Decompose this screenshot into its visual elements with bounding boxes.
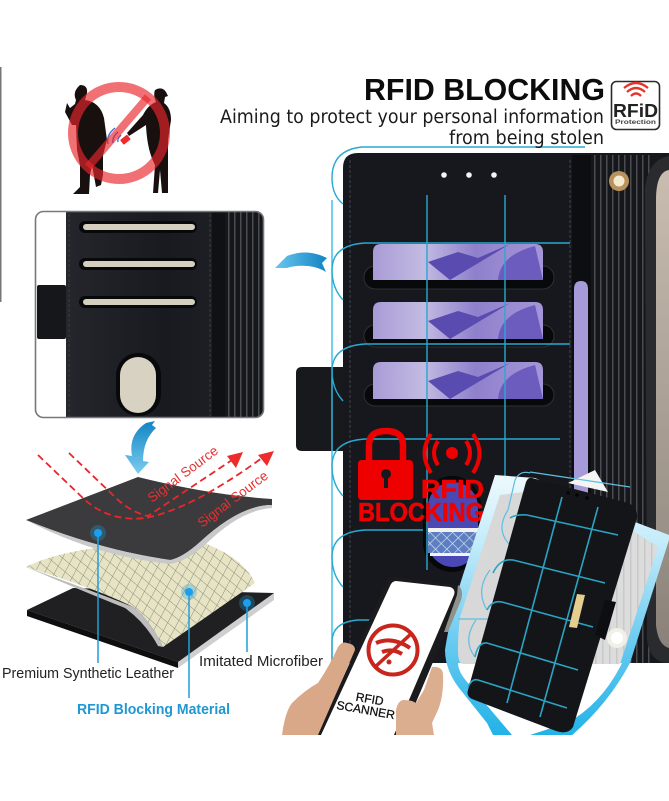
blue scan grid [332,147,585,662]
icon: broadcast [424,434,480,473]
eyelet [609,171,629,191]
phone body [318,592,458,735]
main wallet photo [296,147,669,663]
slot 1 [79,221,197,233]
white footer [0,735,669,801]
signal source labels [145,443,271,530]
shield interior, below the photo [458,663,622,735]
heading: RFID BLOCKING [364,72,605,107]
label: microfiber: Imitated Microfiber [199,654,323,670]
signal source labels: Signal Source [195,468,271,530]
accomplice silhouette [127,88,171,193]
three dots [441,172,497,178]
arrow: wallet to close-up [275,252,327,272]
label: leather: Premium Synthetic Leather [2,666,174,682]
shield ribs, right [595,534,658,664]
top layer: leather [26,477,272,560]
white clasp circle [607,628,627,648]
white peak [568,470,608,492]
arrow: close-up to layers [125,421,156,474]
oval window [423,476,481,572]
phone rim [444,585,462,632]
top dots [566,491,589,500]
man silhouette [65,85,107,194]
oval window [116,353,161,416]
icon: padlock [358,431,413,500]
slot 3 [79,296,197,308]
shielded wallet [445,470,669,745]
card slot 2 [364,302,554,347]
icon: RFID protection badge: Protection [615,120,656,126]
bottom layer: microfiber [27,588,274,668]
middle layer: shielding mesh [26,543,255,647]
shield interior over photo [458,490,658,664]
slot 2 [79,258,197,270]
RFID blocking stamp: RFID [421,474,484,504]
grid lines [468,497,618,717]
icon: RFID protection badge [612,82,660,130]
screen [321,581,454,735]
signal lines [38,453,262,519]
left edge rule [0,67,2,302]
strap [600,600,616,640]
shield outline [445,475,669,745]
phone edge [645,156,669,663]
prohibition sign [73,87,165,179]
label: blocking material: RFID Blocking Material [77,701,230,718]
card [120,135,131,145]
phone with scanner [282,577,462,740]
wallet strap [296,367,350,451]
icon: RFID protection badge: RFiD [613,101,658,121]
subheading: from being stolen [449,128,604,149]
signal waves [108,128,121,144]
purple inner card strip [574,281,588,500]
scanner label: SCANNER [335,698,396,722]
fingers [396,667,443,735]
icon: no wifi [368,626,418,674]
clasp strap [37,285,66,339]
RFID blocking stamp: BLOCKING [358,497,484,527]
scan lines over shield [458,472,630,657]
small wallet [468,478,637,732]
leader lines and markers [90,525,255,698]
wallet body [343,153,669,663]
signal source labels: Signal Source [145,443,221,505]
subheading: Aiming to protect your personal information [220,107,604,128]
arrowheads [227,452,243,468]
stitching [350,160,570,660]
gold clasp [569,594,585,628]
scanner label: RFID [355,690,385,708]
icon: pickpocket prohibited [65,85,171,194]
hand [282,642,355,735]
RFID blocking stamp [358,431,484,527]
panel: card slots close-up [35,211,264,418]
card slot 3 [364,362,554,406]
ribbed spine [591,155,651,663]
card slot 1 [364,244,554,289]
layers diagram [26,443,274,698]
subheading [220,107,604,149]
